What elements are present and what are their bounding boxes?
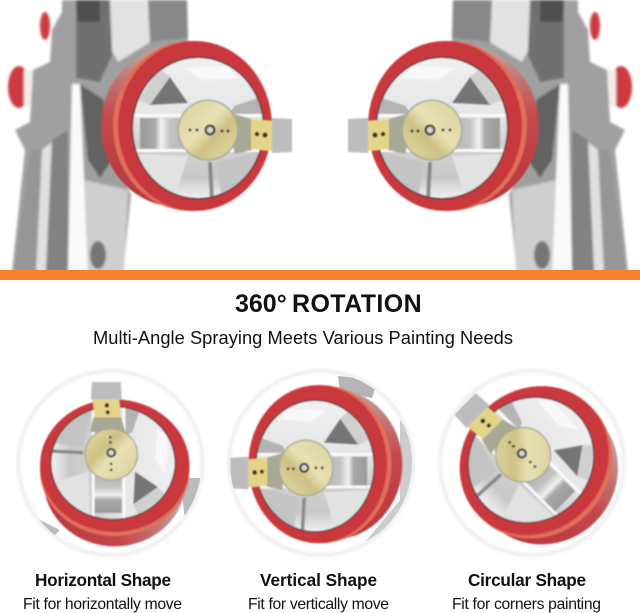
panel: circular shape xyxy=(438,369,626,612)
caption: horizontal shape: Fit for horizontally move xyxy=(23,596,182,613)
label: circular shape: Circular Shape xyxy=(468,570,586,590)
right spray gun photo xyxy=(348,0,632,272)
caption: circular shape: Fit for corners painting xyxy=(452,596,601,613)
orange divider band xyxy=(0,270,640,280)
panel: vertical shape xyxy=(229,371,415,613)
nozzle photo: circular xyxy=(454,385,619,546)
circle frame: circular xyxy=(440,371,624,555)
subtitle: Multi-Angle Spraying Meets Various Painting Needs xyxy=(93,327,513,348)
nozzle photo: vertical xyxy=(230,376,415,543)
label: vertical shape: Vertical Shape xyxy=(260,570,377,590)
title: 360° xyxy=(235,290,287,318)
label: horizontal shape: Horizontal Shape xyxy=(35,570,171,590)
title: ROTATION xyxy=(292,290,422,318)
circle frame: vertical xyxy=(229,371,413,555)
circle frame: horizontal xyxy=(18,371,202,555)
panel: horizontal shape xyxy=(18,371,205,613)
left spray gun photo xyxy=(8,0,292,272)
nozzle photo: horizontal xyxy=(30,382,205,546)
caption: vertical shape: Fit for vertically move xyxy=(248,596,389,613)
